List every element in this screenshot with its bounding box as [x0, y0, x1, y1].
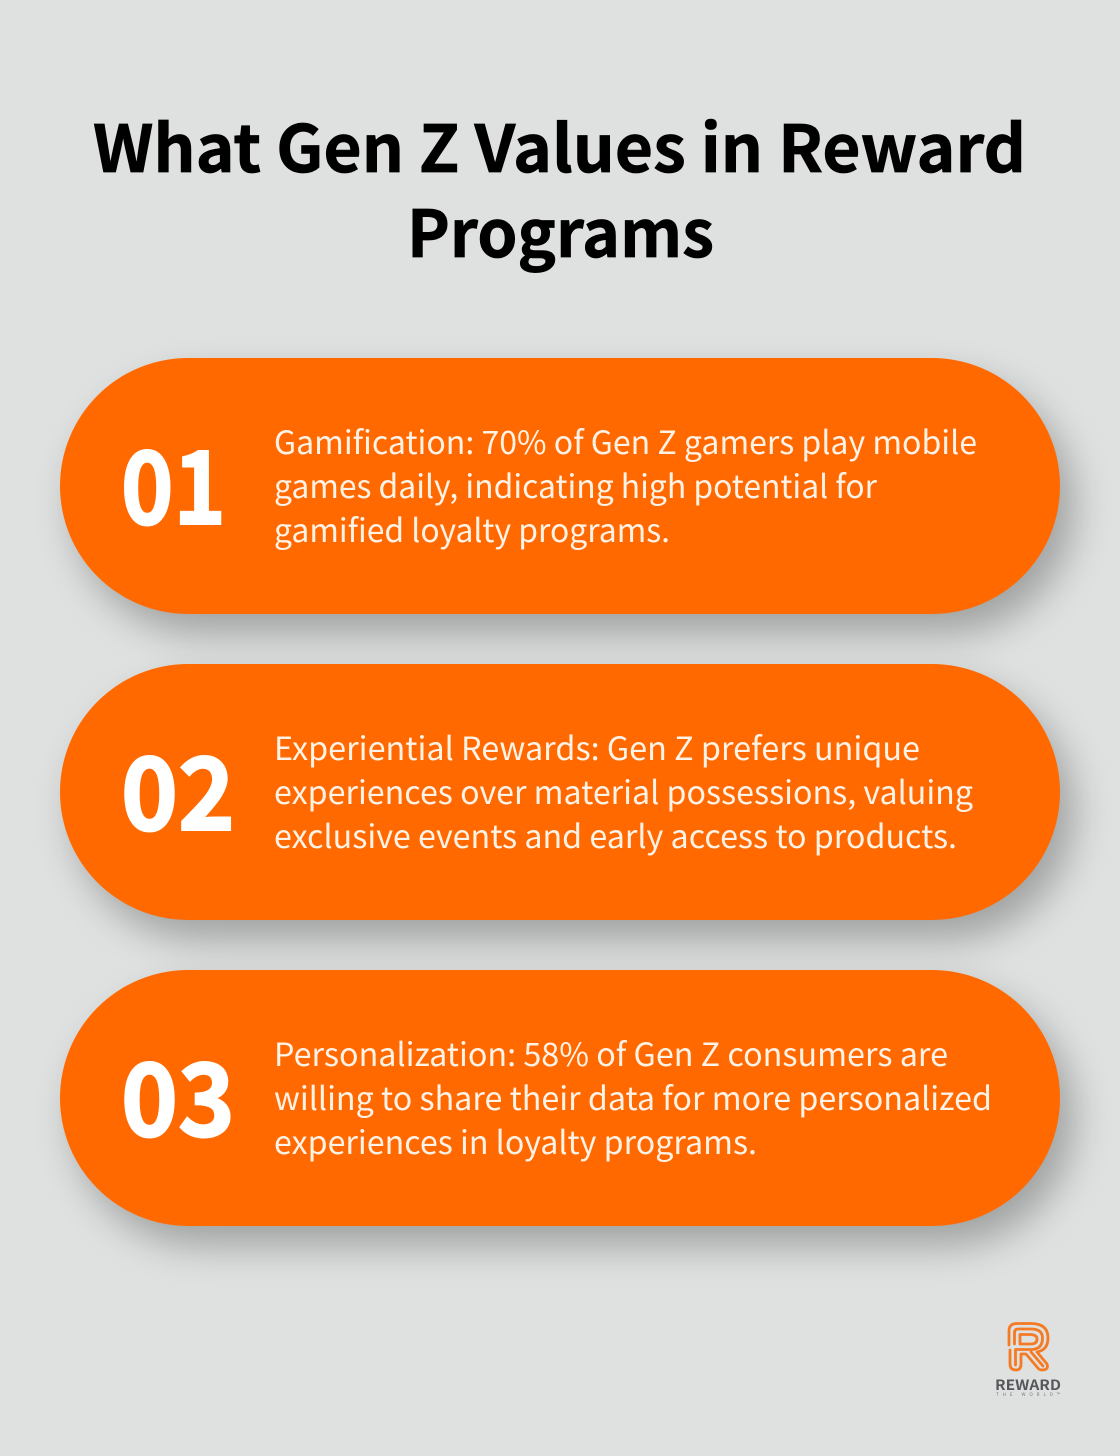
text: gamification: gamified loyalty programs.: [274, 506, 670, 552]
text: personalization: experiences in loyalty programs.: [274, 1118, 757, 1164]
item 01 content: [121, 408, 977, 554]
text: gamification: games daily, indicating high potential for: [274, 462, 878, 508]
panel: item 02 background: [60, 664, 1060, 920]
text: experiential rewards: exclusive events and early access to products.: [274, 812, 957, 858]
item 02 content: [121, 714, 973, 860]
item 03 content: [121, 1020, 992, 1166]
panel: item 03 background: [60, 970, 1060, 1226]
icon: R mark: [1009, 1324, 1048, 1370]
text: experiential rewards: Experiential Rewards: Gen Z prefers unique: [274, 724, 920, 770]
logo wordmark: REWARD: [995, 1375, 1061, 1395]
number 01: 01: [121, 408, 226, 554]
number 03: 03: [121, 1020, 235, 1166]
panel: item 01 background: [60, 358, 1060, 614]
text: personalization: Personalization: 58% of Gen Z consumers are: [274, 1030, 948, 1076]
title: Programs: [407, 182, 714, 276]
logo: Reward the World: [995, 1324, 1061, 1398]
logo tagline: THE WORLD™: [996, 1392, 1061, 1398]
text: gamification: Gamification: 70% of Gen Z gamers play mobile: [274, 418, 977, 464]
number 02: 02: [121, 714, 235, 860]
title: What Gen Z Values in Reward: [93, 97, 1026, 191]
title: [93, 97, 1026, 276]
text: experiential rewards: [274, 724, 973, 858]
text: personalization: willing to share their data for more personalized: [274, 1074, 992, 1120]
text: gamification: [274, 418, 977, 552]
text: experiential rewards: experiences over material possessions, valuing: [274, 768, 973, 814]
text: personalization: [274, 1030, 992, 1164]
